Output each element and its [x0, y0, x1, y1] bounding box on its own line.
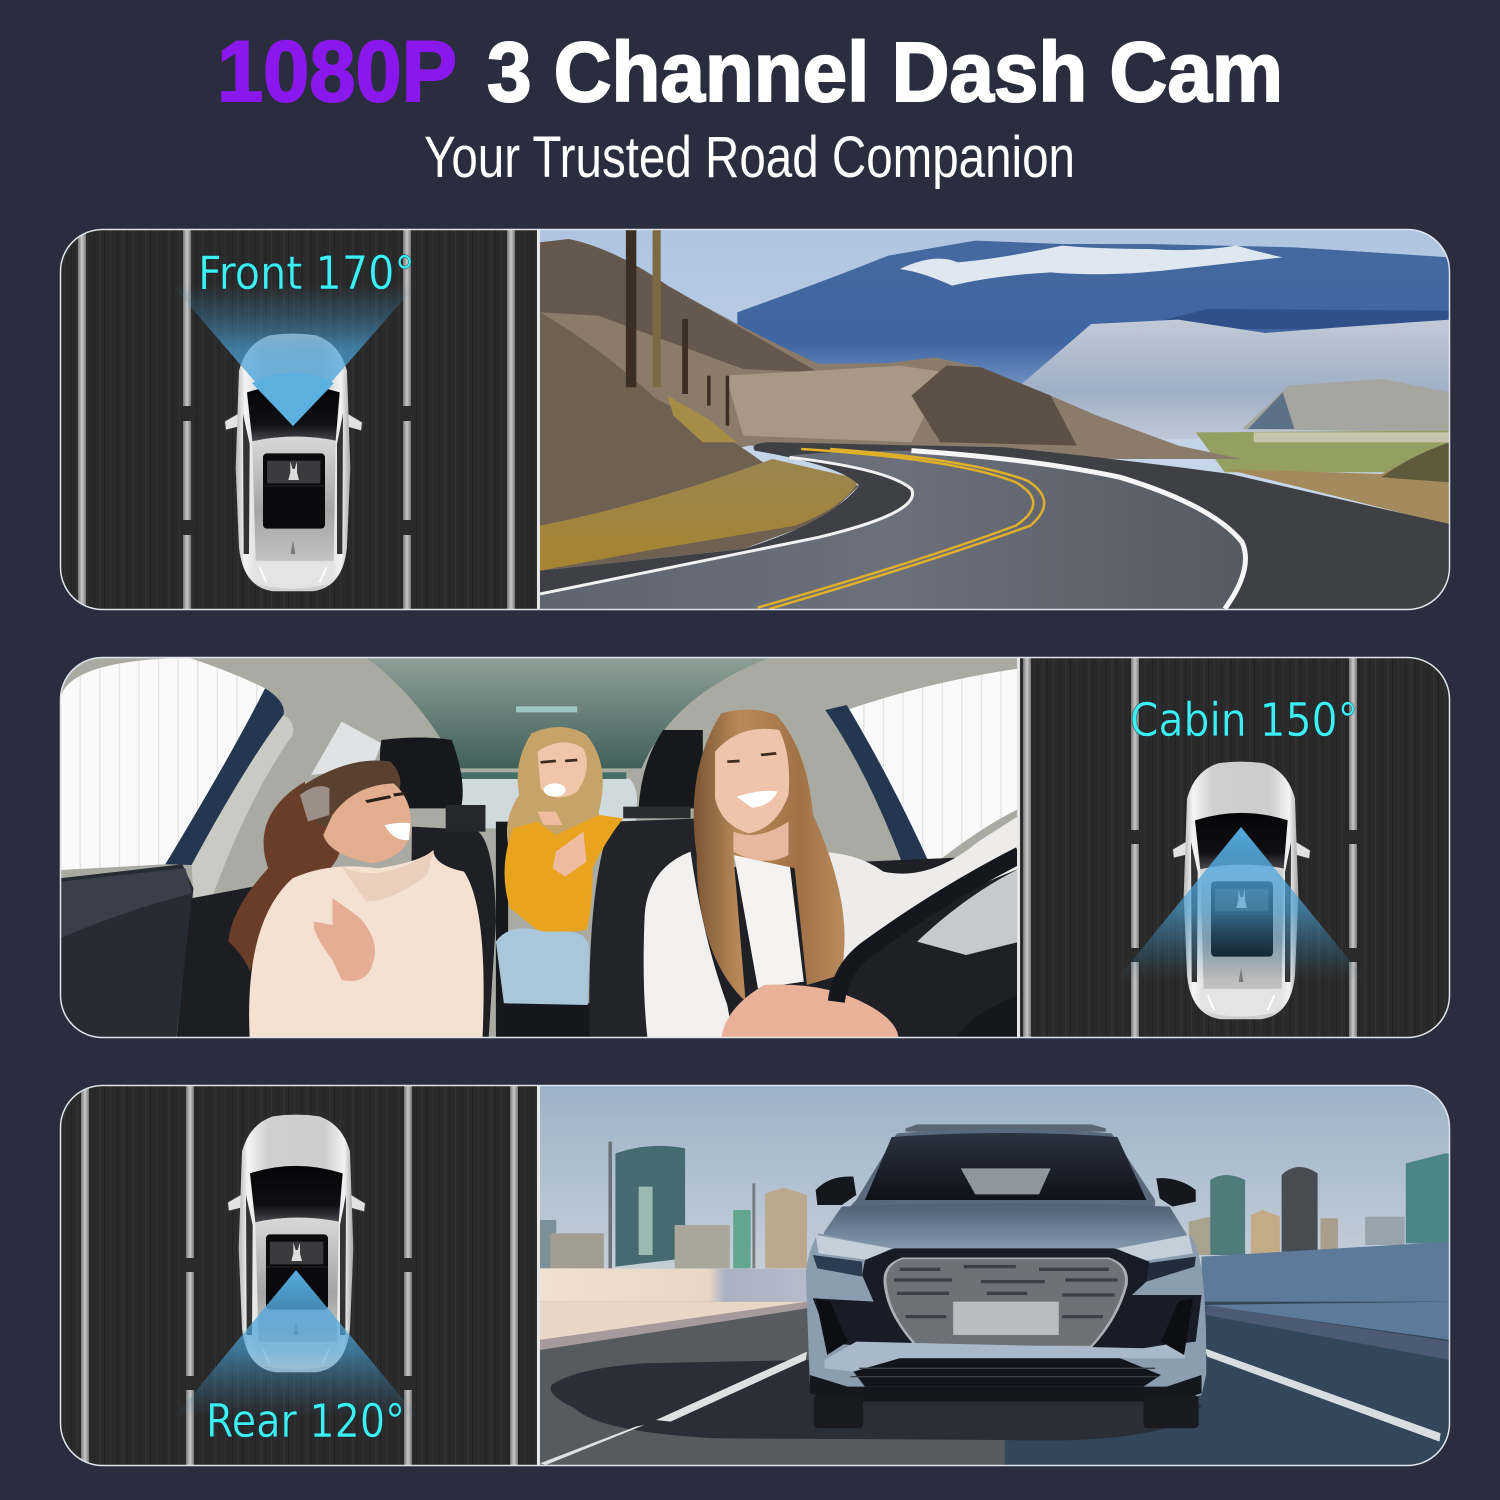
title	[217, 24, 1283, 120]
valley and fields	[1196, 431, 1450, 472]
car top view: front	[225, 334, 362, 591]
panel: cabin camera	[60, 655, 1450, 1040]
car shadow	[551, 1360, 1202, 1441]
camera cone: front 170 degrees	[172, 285, 416, 426]
right window	[847, 668, 1020, 868]
dome light	[516, 706, 577, 712]
road diagram: front	[60, 229, 538, 609]
skyline	[540, 1142, 1450, 1268]
lower right dash area	[703, 855, 1020, 1040]
label: Front 170°: Front 170°	[198, 246, 415, 300]
car top view: rear	[228, 1115, 365, 1372]
far mountain	[737, 241, 1450, 386]
photo: mountain road	[540, 229, 1450, 609]
ceiling	[366, 658, 770, 768]
left window	[60, 658, 265, 870]
near slope and grass	[540, 312, 859, 571]
front door	[60, 864, 193, 1040]
camera cone: cabin 150 degrees	[1118, 827, 1364, 978]
road lines	[540, 457, 913, 594]
walls	[540, 1268, 807, 1302]
middle hills	[1155, 309, 1450, 329]
panel: rear camera	[60, 1085, 1450, 1466]
headrests and seats	[380, 737, 463, 808]
road surface	[540, 442, 1450, 609]
SUV	[806, 1124, 1206, 1428]
car top view: cabin	[1173, 762, 1310, 1019]
woman left	[228, 761, 484, 1040]
photo: three women in car cabin	[60, 655, 1020, 1040]
woman middle	[496, 727, 623, 1005]
photo: SUV on city highway	[540, 1085, 1450, 1465]
road diagram: cabin	[1017, 657, 1450, 1037]
subtitle: Your Trusted Road Companion	[424, 125, 1075, 190]
small side and rear windows	[311, 722, 381, 775]
cloud	[900, 246, 1283, 286]
panel: front camera	[60, 229, 1450, 610]
woman driver	[644, 710, 1020, 1040]
camera cone: rear 120 degrees	[176, 1270, 416, 1415]
label: Rear 120°: Rear 120°	[206, 1394, 405, 1448]
road surface	[540, 1302, 1004, 1465]
road diagram: rear	[60, 1085, 540, 1465]
brown hillside	[540, 239, 1242, 459]
title: 1080P: 1080P	[217, 24, 457, 120]
title: 3 Channel Dash Cam: 3 Channel Dash Cam	[487, 25, 1283, 119]
label: Cabin 150°: Cabin 150°	[1130, 693, 1358, 747]
lane markings	[540, 1352, 807, 1465]
utility poles	[626, 229, 729, 426]
